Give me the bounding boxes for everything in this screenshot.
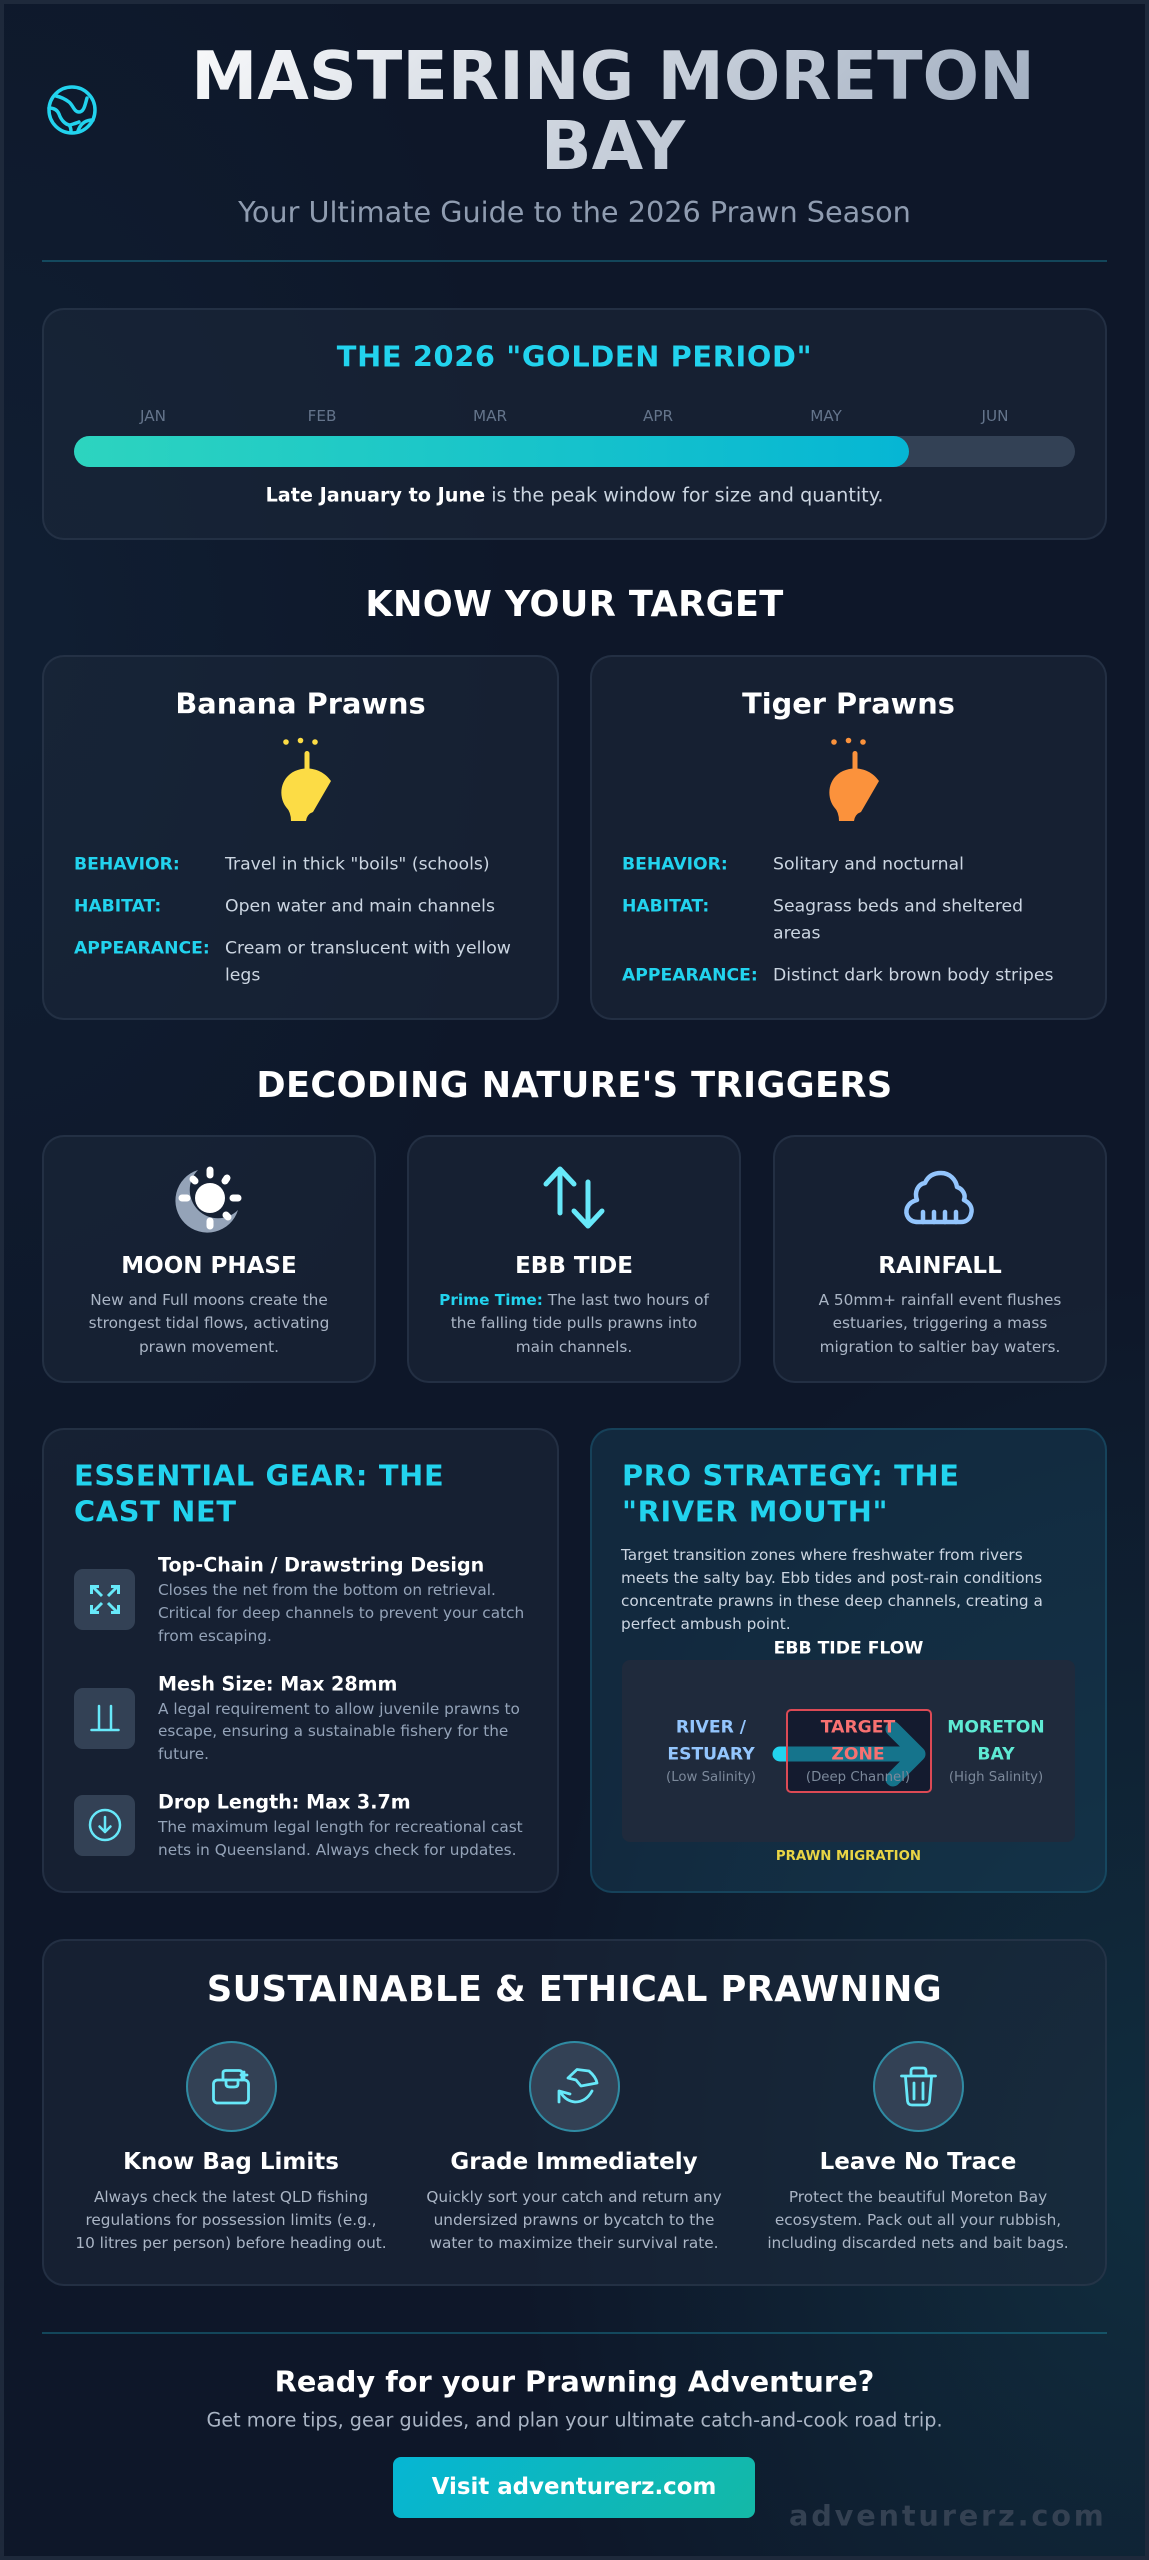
gear item: drawstring: Top-Chain / Drawstring Design xyxy=(158,1554,484,1577)
target zone box xyxy=(786,1709,932,1793)
strategy description: meets the salty bay. Ebb tides and post-rain conditions xyxy=(621,1569,1042,1587)
card title: Banana Prawns xyxy=(175,687,426,721)
watermark: adventurerz.com xyxy=(789,2499,1107,2533)
label: river xyxy=(666,1718,756,1785)
tip: bag limits: 10 litres per person) before heading out. xyxy=(75,2234,387,2252)
heading: nature's triggers: DECODING NATURE'S TRIGGERS xyxy=(256,1065,893,1106)
facts list xyxy=(622,855,1053,986)
icon: recycle catch xyxy=(528,2041,620,2132)
description: A 50mm+ rainfall event flushes xyxy=(819,1291,1061,1309)
icon: up and down arrows xyxy=(544,1166,604,1228)
description: estuaries, triggering a mass xyxy=(833,1314,1047,1332)
season timeline bar xyxy=(74,436,1075,467)
gear item: drop length: Drop Length: Max 3.7m xyxy=(158,1791,411,1814)
gear item: drop length: The maximum legal length for recreational cast xyxy=(158,1818,523,1836)
panel: banana prawns xyxy=(42,655,559,1020)
footer heading: Ready for your Prawning Adventure? xyxy=(275,2365,874,2399)
description xyxy=(89,1291,329,1356)
timeline caption: Late January to June is the peak window for size and quantity. xyxy=(266,483,883,506)
icon: expand arrows xyxy=(74,1569,135,1630)
tip: grade immediately: water to maximize their survival rate. xyxy=(430,2234,718,2252)
icon: tiger prawn xyxy=(829,738,879,821)
description: main channels. xyxy=(516,1338,632,1356)
tip: leave no trace: ecosystem. Pack out all your rubbish, xyxy=(775,2211,1061,2229)
gear item: mesh size: future. xyxy=(158,1745,209,1763)
footer text: Get more tips, gear guides, and plan your ultimate catch-and-cook road trip. xyxy=(206,2408,943,2431)
description: Prime Time: The last two hours of xyxy=(439,1291,709,1309)
gear item: mesh size xyxy=(74,1673,520,1763)
month labels: JAN xyxy=(140,407,166,425)
label: target zone: (Deep Channel) xyxy=(806,1770,910,1785)
label: moreton bay xyxy=(947,1718,1045,1785)
tip: leave no trace xyxy=(767,2041,1069,2252)
label: moreton bay: BAY xyxy=(977,1745,1015,1765)
month labels xyxy=(139,407,1008,425)
icon: mesh posts xyxy=(74,1688,135,1749)
label: river: (Low Salinity) xyxy=(666,1770,756,1785)
diagram: ebb tide flow xyxy=(622,1660,1075,1842)
month labels: MAY xyxy=(810,407,842,425)
tip: grade immediately: undersized prawns or bycatch to the xyxy=(434,2211,714,2229)
facts list: Solitary and nocturnal xyxy=(773,855,964,875)
tip: leave no trace: Protect the beautiful Moreton Bay xyxy=(789,2188,1047,2206)
description: migration to saltier bay waters. xyxy=(820,1338,1060,1356)
heading: pro strategy: PRO STRATEGY: THE xyxy=(622,1459,960,1493)
heading: sustainable: SUSTAINABLE & ETHICAL PRAWNING xyxy=(207,1969,942,2010)
tip: leave no trace: including discarded nets and bait bags. xyxy=(767,2234,1069,2252)
facts list: BEHAVIOR: xyxy=(74,855,180,875)
panel: moon phase xyxy=(42,1135,376,1383)
facts list: APPEARANCE: xyxy=(622,966,758,986)
strategy description xyxy=(620,1546,1043,1633)
facts list: Open water and main channels xyxy=(225,897,495,917)
diagram title: EBB TIDE FLOW xyxy=(774,1639,923,1659)
card title: Tiger Prawns xyxy=(742,687,955,721)
label: moreton bay: (High Salinity) xyxy=(949,1770,1043,1785)
facts list: areas xyxy=(773,924,820,944)
label: river: ESTUARY xyxy=(667,1745,755,1765)
panel: essential gear xyxy=(42,1428,559,1893)
label: target zone xyxy=(806,1718,910,1785)
tip: bag limits: Always check the latest QLD fishing xyxy=(94,2188,368,2206)
button: visit site xyxy=(393,2457,755,2518)
title: BAY xyxy=(541,107,685,185)
label: target zone: TARGET xyxy=(821,1718,895,1738)
heading: golden period: THE 2026 "GOLDEN PERIOD" xyxy=(337,340,812,374)
icon: moon and sun xyxy=(175,1166,242,1233)
facts list: Distinct dark brown body stripes xyxy=(773,966,1053,986)
description: prawn movement. xyxy=(139,1338,279,1356)
gear item: drop length xyxy=(74,1791,523,1859)
heading: essential gear: ESSENTIAL GEAR: THE xyxy=(74,1459,444,1493)
card title: EBB TIDE xyxy=(515,1253,633,1279)
description: New and Full moons create the xyxy=(90,1291,328,1309)
label: prawn migration: PRAWN MIGRATION xyxy=(776,1849,921,1864)
subtitle: Your Ultimate Guide to the 2026 Prawn Season xyxy=(238,195,911,229)
panel: tiger prawns xyxy=(590,655,1107,1020)
heading: essential gear: CAST NET xyxy=(74,1495,237,1529)
description: strongest tidal flows, activating xyxy=(89,1314,329,1332)
heading: pro strategy: "RIVER MOUTH" xyxy=(622,1495,888,1529)
month labels: FEB xyxy=(308,407,336,425)
panel: rainfall xyxy=(773,1135,1107,1383)
button: visit site: Visit adventurerz.com xyxy=(432,2474,716,2500)
icon: banana prawn xyxy=(281,738,331,821)
description xyxy=(818,1291,1061,1356)
gear item: mesh size: A legal requirement to allow juvenile prawns to xyxy=(158,1700,520,1718)
description xyxy=(439,1291,710,1356)
icon: down arrow circle xyxy=(74,1795,135,1856)
tip: grade immediately: Quickly sort your catch and return any xyxy=(426,2188,722,2206)
arrow: flow direction xyxy=(772,1722,926,1786)
facts list: HABITAT: xyxy=(74,897,161,917)
month labels: JUN xyxy=(982,407,1008,425)
gear item: drawstring xyxy=(74,1554,524,1645)
icon: trash can xyxy=(872,2041,964,2132)
facts list: Cream or translucent with yellow xyxy=(225,939,511,959)
icon: cooler bag xyxy=(186,2041,276,2132)
panel: pro strategy xyxy=(590,1428,1107,1893)
month labels: MAR xyxy=(473,407,507,425)
strategy description: Target transition zones where freshwater from rivers xyxy=(621,1546,1023,1564)
tip: bag limits: Know Bag Limits xyxy=(123,2149,339,2175)
icon: rain cloud xyxy=(904,1170,974,1224)
title xyxy=(119,41,1107,181)
facts list: Seagrass beds and sheltered xyxy=(773,897,1023,917)
panel: ebb tide xyxy=(407,1135,741,1383)
description: the falling tide pulls prawns into xyxy=(451,1314,697,1332)
label: target zone: ZONE xyxy=(831,1745,885,1765)
heading: pro strategy xyxy=(622,1459,960,1529)
label: moreton bay: MORETON xyxy=(947,1718,1045,1738)
facts list: HABITAT: xyxy=(622,897,709,917)
gear item: drawstring: Closes the net from the bottom on retrieval. xyxy=(158,1581,496,1599)
panel: golden period xyxy=(42,308,1107,540)
strategy description: perfect ambush point. xyxy=(621,1615,791,1633)
card title: MOON PHASE xyxy=(121,1253,297,1279)
month labels: APR xyxy=(643,407,673,425)
title: MASTERING MORETON xyxy=(191,37,1035,115)
tip: grade immediately: Grade Immediately xyxy=(450,2149,698,2175)
gear item: drawstring: from escaping. xyxy=(158,1627,272,1645)
tip: bag limits xyxy=(75,2041,387,2252)
gear item: drawstring: Critical for deep channels to prevent your catch xyxy=(158,1604,524,1622)
facts list: APPEARANCE: xyxy=(74,939,210,959)
gear item: mesh size: Mesh Size: Max 28mm xyxy=(158,1673,397,1696)
panel: sustainable and ethical prawning xyxy=(42,1939,1107,2286)
tip: grade immediately xyxy=(426,2041,722,2252)
label: river: RIVER / xyxy=(676,1718,746,1738)
heading: essential gear xyxy=(74,1459,444,1529)
facts list: legs xyxy=(225,966,260,986)
tip: leave no trace: Leave No Trace xyxy=(820,2149,1016,2175)
heading: know your target: KNOW YOUR TARGET xyxy=(365,584,784,625)
tip: bag limits: regulations for possession limits (e.g., xyxy=(85,2211,377,2229)
facts list xyxy=(74,855,511,986)
facts list: BEHAVIOR: xyxy=(622,855,728,875)
icon: globe xyxy=(47,85,97,135)
strategy description: concentrate prawns in these deep channels, creating a xyxy=(621,1592,1043,1610)
card title: RAINFALL xyxy=(878,1253,1002,1279)
gear item: mesh size: escape, ensuring a sustainable fishery for the xyxy=(158,1722,508,1740)
facts list: Travel in thick "boils" (schools) xyxy=(225,855,490,875)
gear item: drop length: nets in Queensland. Always check for updates. xyxy=(158,1841,516,1859)
